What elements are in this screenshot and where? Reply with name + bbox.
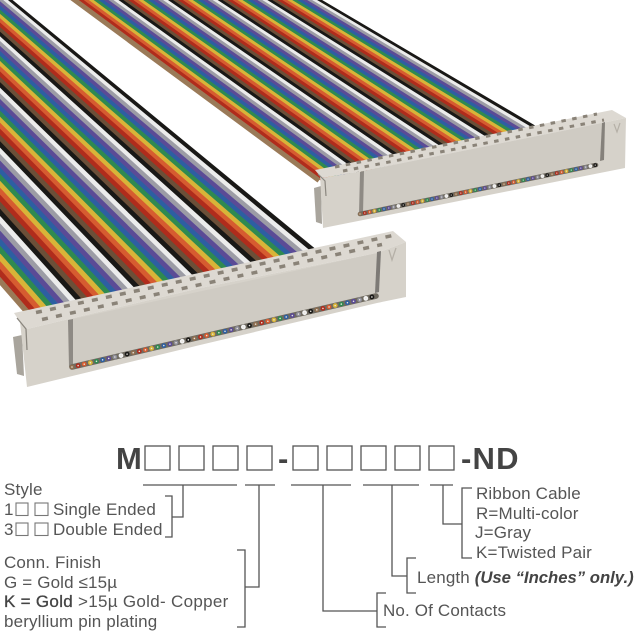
rear rainbow ribbon cable xyxy=(70,0,536,179)
rear connector wire ends xyxy=(360,165,596,214)
front connector left slot xyxy=(68,319,73,367)
part number prefix M: M xyxy=(116,441,142,476)
ribbon cable legend: Ribbon Cable xyxy=(476,484,581,503)
connector finish legend: beryllium pin plating xyxy=(4,612,157,631)
rear connector xyxy=(314,110,626,228)
front connector key mark xyxy=(389,248,396,260)
front connector wire ends xyxy=(72,296,376,367)
part number dash: - xyxy=(278,441,288,476)
front connector recessed panel xyxy=(71,253,377,367)
ribbon cable legend xyxy=(475,484,592,562)
single ended row xyxy=(4,500,156,519)
rear connector right slot xyxy=(600,122,605,161)
part number suffix: -ND xyxy=(461,441,520,476)
double ended row: Double Ended xyxy=(53,520,163,539)
front connector xyxy=(13,231,406,387)
single ended row: Single Ended xyxy=(53,500,156,519)
front connector end clip xyxy=(17,318,27,350)
style legend xyxy=(4,480,163,539)
leader lines xyxy=(143,485,472,627)
part number digit boxes xyxy=(145,446,454,470)
rear connector holes xyxy=(335,114,604,171)
front connector holes xyxy=(36,235,395,320)
rear connector left slot xyxy=(359,171,364,214)
rear connector end clip xyxy=(318,174,326,196)
double ended row: 3 xyxy=(4,520,14,539)
ribbon cable legend: K=Twisted Pair xyxy=(476,543,592,562)
connector finish legend: G = Gold ≤15µ xyxy=(4,573,117,592)
rear connector side tab xyxy=(314,186,322,224)
ribbon cable legend: J=Gray xyxy=(475,523,532,542)
length legend: Length (Use “Inches” only.) xyxy=(417,568,634,587)
front connector front body xyxy=(20,242,406,387)
connector finish legend: K = Gold >15µ Gold- Copper xyxy=(4,592,229,611)
double ended row xyxy=(4,520,163,539)
style heading: Style xyxy=(4,480,43,499)
front connector top face xyxy=(14,231,406,329)
front connector right slot xyxy=(375,251,381,293)
connector finish legend: Conn. Finish xyxy=(4,553,101,572)
rear connector front body xyxy=(320,118,626,228)
rear connector recessed panel xyxy=(361,123,602,213)
front rainbow ribbon cable xyxy=(0,0,312,313)
single ended row: 1 xyxy=(4,500,14,519)
rear connector key mark xyxy=(614,123,620,132)
part number heading xyxy=(116,441,520,476)
front connector side tab xyxy=(13,335,24,376)
rear connector top face xyxy=(315,110,626,178)
ribbon cable legend: R=Multi-color xyxy=(476,504,579,523)
connector finish legend xyxy=(4,553,229,631)
number of contacts legend: No. Of Contacts xyxy=(383,601,506,620)
